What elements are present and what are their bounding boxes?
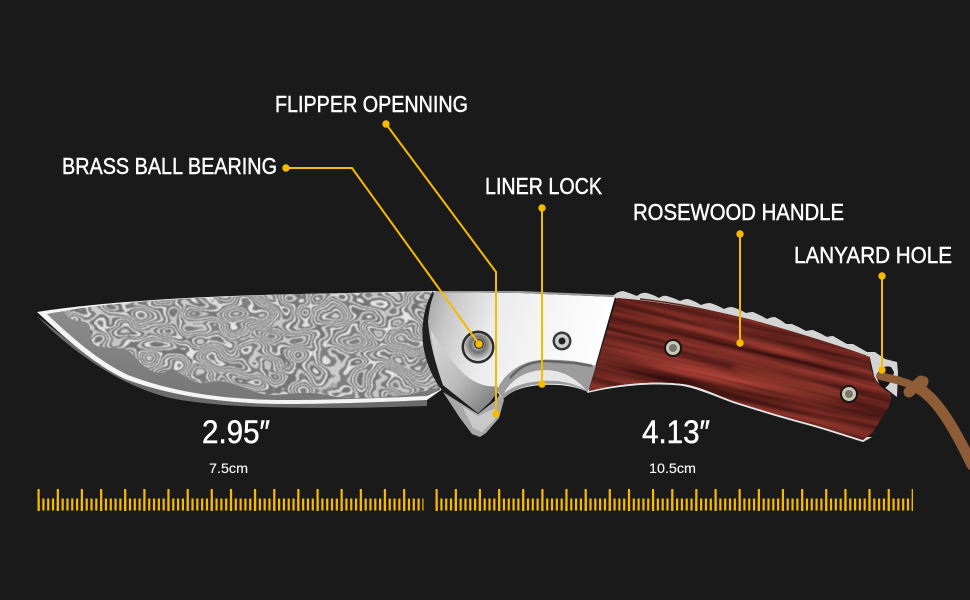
callout: brass ball bearing: BRASS BALL BEARING — [62, 153, 277, 179]
lanyard hole — [877, 366, 894, 388]
callout: lanyard hole: LANYARD HOLE — [794, 242, 952, 268]
handle length: 4.13″ — [642, 414, 710, 450]
knife — [37, 291, 970, 470]
blade length — [202, 414, 270, 476]
blade length: 7.5cm — [209, 460, 248, 476]
handle spine with file work — [613, 291, 898, 397]
pivot ball bearing — [462, 330, 494, 364]
lower shield facet — [431, 330, 499, 413]
ruler: blade — [38, 500, 424, 504]
choil shadow — [510, 361, 592, 378]
ruler: handle — [436, 500, 913, 504]
bolster top edge — [435, 291, 615, 297]
callout: flipper openning: FLIPPER OPENNING — [275, 91, 468, 117]
rosewood handle scale — [587, 298, 891, 442]
steel bolster — [428, 291, 615, 413]
handle screw lower — [840, 385, 858, 403]
leather lanyard — [880, 376, 970, 465]
flipper tab — [443, 392, 504, 437]
blade — [37, 290, 444, 408]
dark recess behind bolster — [422, 291, 458, 400]
callout: liner lock: LINER LOCK — [485, 173, 603, 199]
handle length: 10.5cm — [649, 460, 696, 476]
callout: liner lock — [485, 173, 603, 388]
finger choil facets — [497, 360, 596, 399]
handle length — [642, 414, 710, 476]
callout: brass ball bearing — [62, 153, 483, 348]
handle screw upper — [664, 339, 682, 357]
callout: lanyard hole — [794, 242, 952, 374]
spine groove — [640, 299, 866, 356]
blade length: 2.95″ — [202, 414, 270, 450]
callout: flipper openning — [275, 91, 500, 418]
bolster screw — [552, 332, 572, 350]
callout: rosewood handle: ROSEWOOD HANDLE — [633, 199, 844, 225]
callout: rosewood handle — [633, 199, 844, 347]
